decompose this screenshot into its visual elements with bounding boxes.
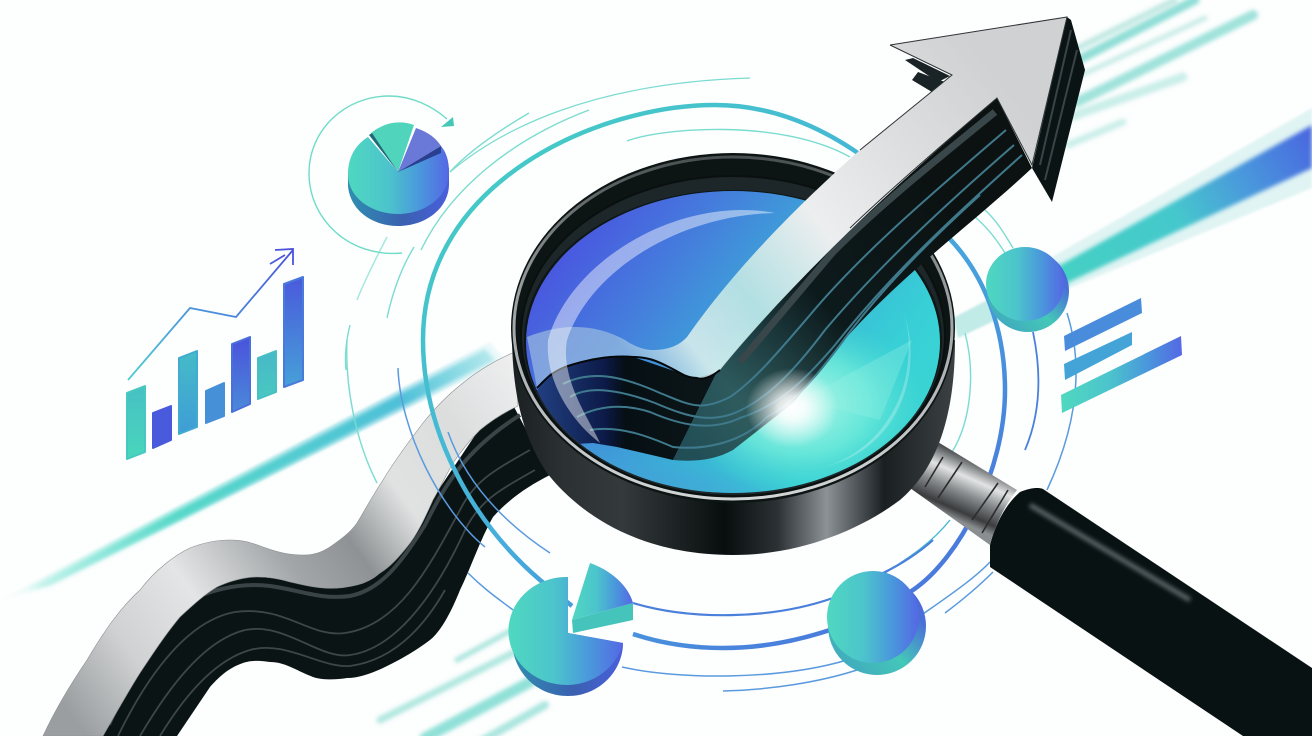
detached slice side	[572, 603, 633, 633]
teal wedge	[371, 122, 414, 172]
glow wedge	[833, 340, 912, 420]
teal glow	[716, 337, 911, 486]
pie face	[508, 577, 623, 685]
orbit rings	[345, 78, 1076, 691]
arrow layer lines	[563, 30, 1077, 448]
trend line	[128, 249, 293, 380]
arrow edges	[850, 17, 1067, 228]
ribbon silver top	[43, 352, 518, 736]
rising ribbon	[43, 352, 550, 736]
top right streaks	[1068, 0, 1253, 145]
pie face	[348, 137, 449, 214]
icon: bottom sphere	[827, 571, 926, 675]
icon: right sphere	[986, 247, 1069, 332]
ribbon black side	[70, 405, 550, 736]
magnifier handle	[903, 433, 1312, 736]
right streak	[953, 108, 1312, 338]
icon: bar chart with trend arrow	[127, 249, 303, 459]
metal collar	[903, 433, 1017, 545]
right highlight arc	[823, 310, 911, 467]
arrow silver top	[527, 17, 1067, 388]
bottom streaks	[380, 630, 545, 736]
bars	[127, 277, 303, 459]
rising arrow	[527, 17, 1085, 461]
lens reflections	[548, 210, 838, 448]
orbit arrow	[309, 96, 447, 253]
inner wall	[521, 176, 945, 496]
left streak	[0, 342, 505, 600]
main ring	[423, 105, 1005, 648]
arrow head black side	[1032, 17, 1085, 202]
glass	[526, 191, 940, 493]
blue wedge	[398, 128, 441, 172]
thin teal arcs	[345, 78, 1013, 573]
detached slice top	[572, 563, 633, 620]
lower left glass tint	[587, 449, 770, 493]
pie side	[348, 168, 449, 226]
lens flare	[746, 368, 838, 448]
arrow notch pieces	[905, 58, 950, 82]
icon: bottom pie chart	[508, 563, 633, 696]
handle grip	[990, 488, 1312, 736]
thin blue arcs	[398, 313, 1076, 691]
pie side	[512, 633, 623, 696]
lens body	[511, 153, 955, 555]
wave dark edge	[537, 357, 720, 388]
glass interior	[537, 314, 912, 493]
ribbon layer lines	[110, 415, 535, 736]
lens outer wall	[512, 340, 955, 555]
lens rim	[511, 153, 955, 503]
icon: top pie chart	[309, 96, 454, 253]
arrow shaft black side	[673, 98, 1032, 461]
wave dark layers	[530, 357, 717, 460]
icon: right list bars	[1061, 298, 1182, 413]
left highlight arc	[548, 210, 775, 443]
